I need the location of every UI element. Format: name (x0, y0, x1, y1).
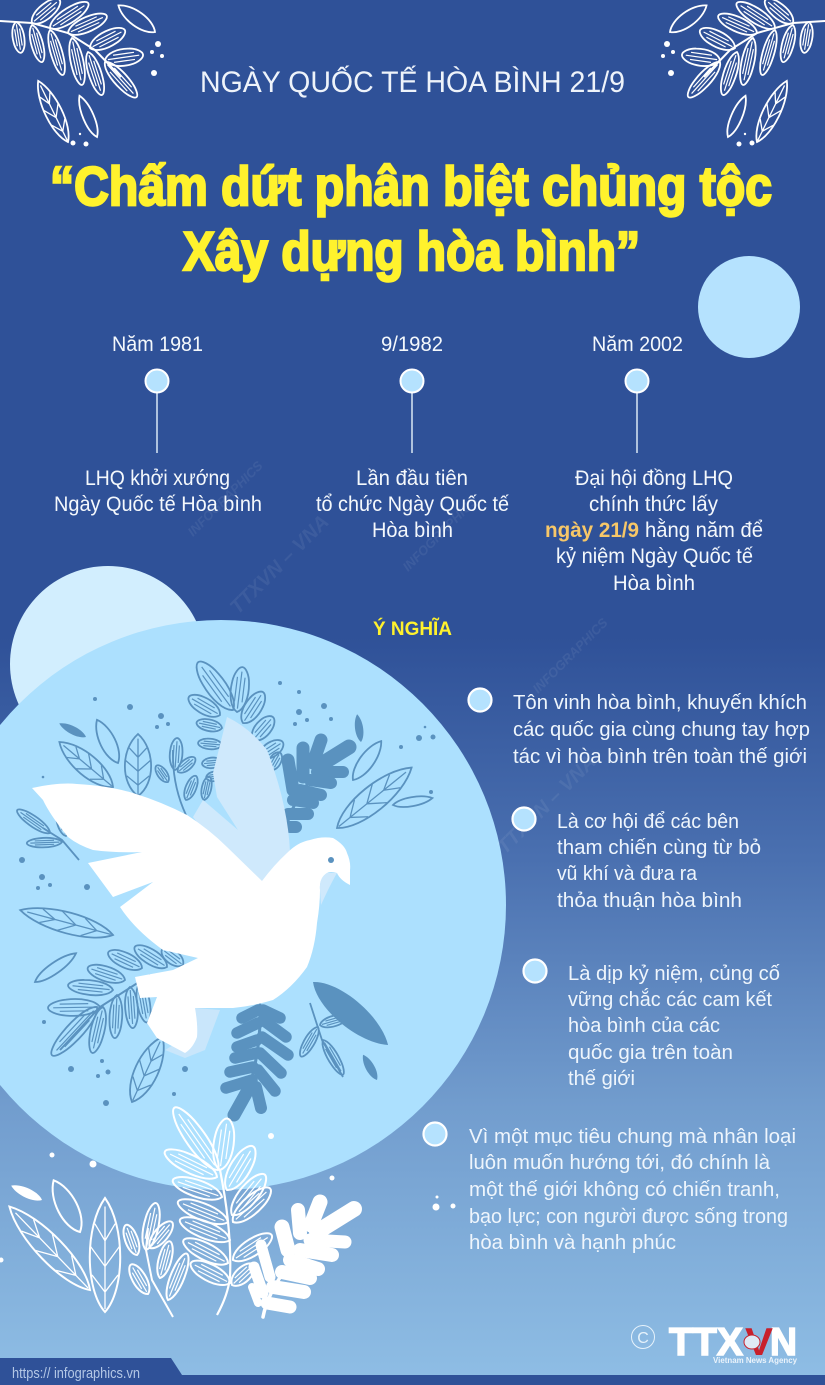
watermarks: INFOGRAPHICS (530, 615, 611, 696)
timeline item: 1981 (54, 333, 262, 516)
timeline item: 1982: 9/1982 (381, 333, 443, 356)
main heading (50, 155, 772, 282)
solid small leaves (57, 714, 397, 1082)
timeline item: 1982: Hòa bình (372, 519, 453, 542)
timeline item: 1981: Năm 1981 (112, 333, 203, 356)
meaning item 4: bạo lực; con người được sống trong (469, 1205, 788, 1228)
dove eye (328, 857, 334, 863)
separate leaves (18, 717, 433, 1107)
timeline item: 1981: LHQ khởi xướng (85, 467, 230, 490)
timeline item: 2002 (545, 333, 763, 595)
small sprig lower right (296, 1003, 348, 1077)
copyright and TTXVN logo (632, 1321, 798, 1365)
illustration: white plants at bottom (0, 1102, 456, 1317)
illustration: leaves behind dove (14, 656, 435, 1115)
pale circle behind dove (10, 566, 206, 762)
solid fern bottom (226, 1005, 288, 1115)
timeline item: 2002: Đại hội đồng LHQ (575, 467, 733, 490)
meaning item 3: thế giới (568, 1067, 635, 1090)
solid fern right (286, 740, 349, 828)
timeline item: 2002: kỷ niệm Ngày Quốc tế (556, 545, 753, 568)
logo red V: V (745, 1321, 773, 1364)
white dots (0, 1133, 456, 1262)
meaning list (424, 688, 810, 1254)
meaning item 4: Vì một mục tiêu chung mà nhân loại (469, 1125, 796, 1148)
meaning item 3: quốc gia trên toàn (568, 1041, 733, 1064)
meaning item 3: hòa bình của các (568, 1014, 720, 1037)
meaning item 2 (512, 808, 761, 912)
footer url: https:// infographics.vn (12, 1365, 140, 1382)
top right circle (698, 256, 800, 358)
timeline item: 2002: chính thức lấy (589, 493, 718, 516)
timeline item: 1982: Lần đầu tiên (356, 467, 468, 490)
small sprig top middle (153, 738, 214, 815)
meaning item 3: vững chắc các cam kết (568, 988, 772, 1011)
footer band (0, 1358, 825, 1385)
meaning item 4: một thế giới không có chiến tranh, (469, 1178, 780, 1201)
timeline item: 1981: Ngày Quốc tế Hòa bình (54, 493, 262, 516)
copyright symbol: C (637, 1330, 649, 1347)
top striped fern (185, 656, 287, 782)
dove back wing (193, 717, 290, 882)
meaning item 1 (468, 688, 810, 768)
title: NGÀY QUỐC TẾ HÒA BÌNH 21/9 (200, 65, 625, 99)
small sprig left (14, 806, 79, 860)
watermarks: INFOGRAPHICS (400, 493, 481, 574)
white small sprig (120, 1202, 193, 1317)
meaning item 2: tham chiến cùng từ bỏ (557, 836, 761, 859)
white veined leaves (0, 1176, 120, 1312)
logo tagline: Vietnam News Agency (713, 1356, 798, 1365)
meaning item 2: Là cơ hội để các bên (557, 810, 739, 833)
watermarks: TTXVN – VNA (226, 511, 333, 619)
dove body (32, 784, 350, 1053)
timeline item: 2002: ngày 21/9 (545, 519, 639, 542)
scattered dots (19, 681, 436, 1106)
meaning item 4: hòa bình và hạnh phúc (469, 1231, 676, 1254)
dove neck shadow (320, 873, 337, 905)
timeline item: 2002: hằng năm để (645, 519, 763, 542)
meaning item 2: vũ khí và đưa ra (557, 862, 698, 885)
logo letters (669, 1321, 797, 1364)
timeline item: 2002: Năm 2002 (592, 333, 683, 356)
meaning item 1: tác vì hòa bình trên toàn thế giới (513, 745, 807, 768)
meaning item 4 (424, 1122, 796, 1254)
meaning item 1: Tôn vinh hòa bình, khuyến khích (513, 691, 807, 714)
meaning item 4: luôn muốn hướng tới, đó chính là (469, 1151, 771, 1174)
big light blue circle (0, 620, 506, 1190)
meaning item 3 (524, 960, 780, 1090)
illustration: dove (32, 717, 350, 1058)
main heading: Xây dựng hòa bình” (183, 220, 640, 282)
logo globe (744, 1335, 760, 1349)
copyright symbol (632, 1326, 654, 1348)
meaning item 2: thỏa thuận hòa bình (557, 889, 742, 912)
decoration: top right leaves (661, 0, 825, 147)
timeline item: 1982 (316, 333, 509, 542)
white striped branch (161, 1102, 276, 1315)
section heading: Ý nghĩa: Ý NGHĨA (373, 616, 452, 640)
meaning item 3: Là dịp kỷ niệm, củng cố (568, 962, 780, 985)
dove tail shadow (165, 1008, 220, 1058)
watermarks (185, 458, 611, 859)
logo letters: TTX (669, 1321, 743, 1364)
timeline item: 2002: Hòa bình (613, 572, 695, 595)
timeline item: 1982: tổ chức Ngày Quốc tế (316, 493, 509, 516)
white solid fern (252, 1202, 354, 1317)
watermarks: TTXVN – VNA (493, 751, 600, 859)
meaning item 1: các quốc gia cùng chung tay hợp (513, 718, 810, 741)
logo letters: N (770, 1321, 797, 1364)
lower left striped fern (46, 941, 187, 1061)
watermarks: INFOGRAPHICS (185, 458, 266, 539)
decoration: top left leaves (0, 0, 164, 147)
timeline (54, 333, 763, 595)
